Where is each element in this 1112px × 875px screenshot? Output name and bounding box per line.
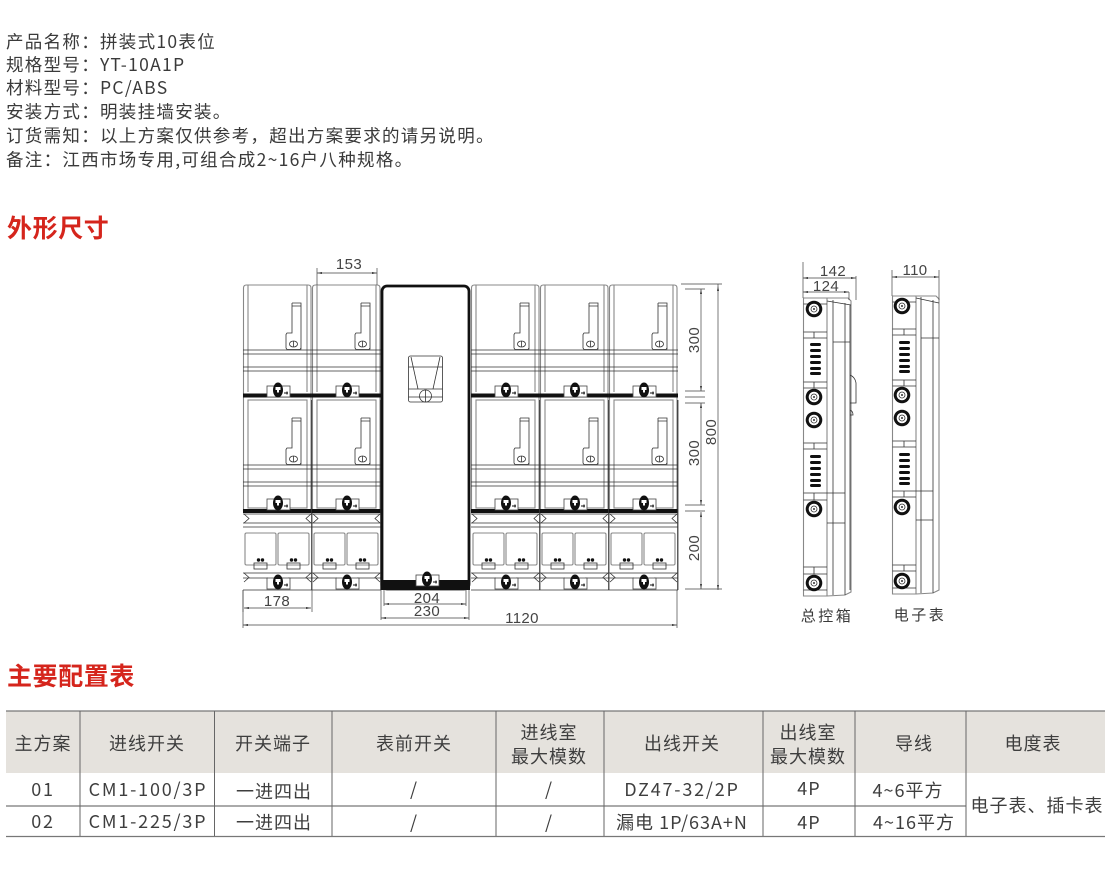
product specification text block: 规格型号：YT-10A1P xyxy=(6,52,185,77)
table row 01: CM1-100/3P xyxy=(89,776,207,802)
table grid lines xyxy=(6,711,1105,836)
dimensions for control box side view xyxy=(803,262,856,300)
dimension annotations for front view: 1120 xyxy=(505,610,539,627)
table header row: 进线开关 xyxy=(109,730,185,756)
merged cell: meter type: 电子表、插卡表 xyxy=(970,792,1104,818)
table header row: 最大模数 xyxy=(770,743,846,769)
central main control box xyxy=(381,286,470,590)
label: electric meter: 电子表 xyxy=(894,604,946,625)
table header row: 最大模数 xyxy=(511,743,587,769)
dimension annotations for front view: 300 xyxy=(686,440,703,466)
dimensions for control box side view: 142 xyxy=(820,263,846,280)
dimensions for meter side view: 110 xyxy=(902,262,928,279)
module column 1 xyxy=(243,285,312,590)
table row 01: DZ47-32/2P xyxy=(624,776,740,802)
module column 2 xyxy=(312,285,381,590)
side view: electric meter box xyxy=(892,296,939,594)
table header row: 电度表 xyxy=(1004,730,1062,756)
dimension annotations for front view: 153 xyxy=(336,256,362,273)
dimensions for control box side view: 124 xyxy=(813,278,839,295)
table row 01 xyxy=(31,775,943,804)
table row 02 xyxy=(31,808,955,835)
table row 01: 4P xyxy=(797,775,821,801)
dimension annotations for front view: 300 xyxy=(686,327,703,353)
table row 01: 01 xyxy=(31,776,55,802)
dimension annotations for front view: 178 xyxy=(264,593,290,610)
module column 6 xyxy=(609,285,678,590)
product specification text block: 安装方式：明装挂墙安装。 xyxy=(6,99,232,124)
table header row: 开关端子 xyxy=(235,730,311,756)
table row 02: / xyxy=(410,809,418,835)
table header row: 进线室 xyxy=(520,719,578,745)
table row 02: 漏电 1P/63A+N xyxy=(616,809,748,835)
table row 01: 一进四出 xyxy=(236,778,312,804)
table header row: 出线室 xyxy=(780,719,836,745)
product specification text block: 产品名称：拼装式10表位 xyxy=(6,29,216,54)
configuration table xyxy=(6,711,1105,836)
product specification text block: 材料型号：PC/ABS xyxy=(6,75,168,100)
dimension annotations for front view: 230 xyxy=(414,603,440,620)
heading: outer dimensions: 外形尺寸 xyxy=(7,209,109,245)
table header row: 导线 xyxy=(895,730,933,756)
dimension annotations for front view: 200 xyxy=(686,535,703,561)
side view: main control box xyxy=(804,298,856,596)
table header row: 主方案 xyxy=(14,730,72,756)
table row 02: 一进四出 xyxy=(236,809,312,835)
dimension annotations for front view xyxy=(243,256,722,628)
module column 5 xyxy=(540,285,609,590)
module column 4 xyxy=(471,285,540,590)
product specification text block: 备注：江西市场专用,可组合成2~16户八种规格。 xyxy=(6,147,413,172)
table header row: 表前开关 xyxy=(376,730,452,756)
label: main control box: 总控箱 xyxy=(801,605,853,626)
heading: main configuration table: 主要配置表 xyxy=(7,657,135,693)
table row 01: / xyxy=(410,776,418,802)
breaker window xyxy=(408,356,442,402)
table row 02: / xyxy=(545,809,553,835)
table row 02: 4~16平方 xyxy=(873,809,955,835)
dimension annotations for front view: 800 xyxy=(703,419,720,445)
table row 02: CM1-225/3P xyxy=(89,808,207,834)
dimension annotations for front view: 204 xyxy=(414,590,440,607)
table row 01: 4~6平方 xyxy=(873,777,943,803)
product specification text block: 订货需知：以上方案仅供参考，超出方案要求的请另说明。 xyxy=(6,123,495,148)
table header background xyxy=(6,711,1105,773)
table header row xyxy=(14,719,1062,769)
product specification text block xyxy=(6,29,495,172)
table row 02: 4P xyxy=(797,809,821,835)
dimensions for meter side view xyxy=(892,262,939,300)
table header row: 出线开关 xyxy=(644,730,720,756)
table row 02: 02 xyxy=(31,808,55,834)
front view drawing of the assembled cabinet xyxy=(243,285,678,590)
table row 01: / xyxy=(545,776,553,802)
